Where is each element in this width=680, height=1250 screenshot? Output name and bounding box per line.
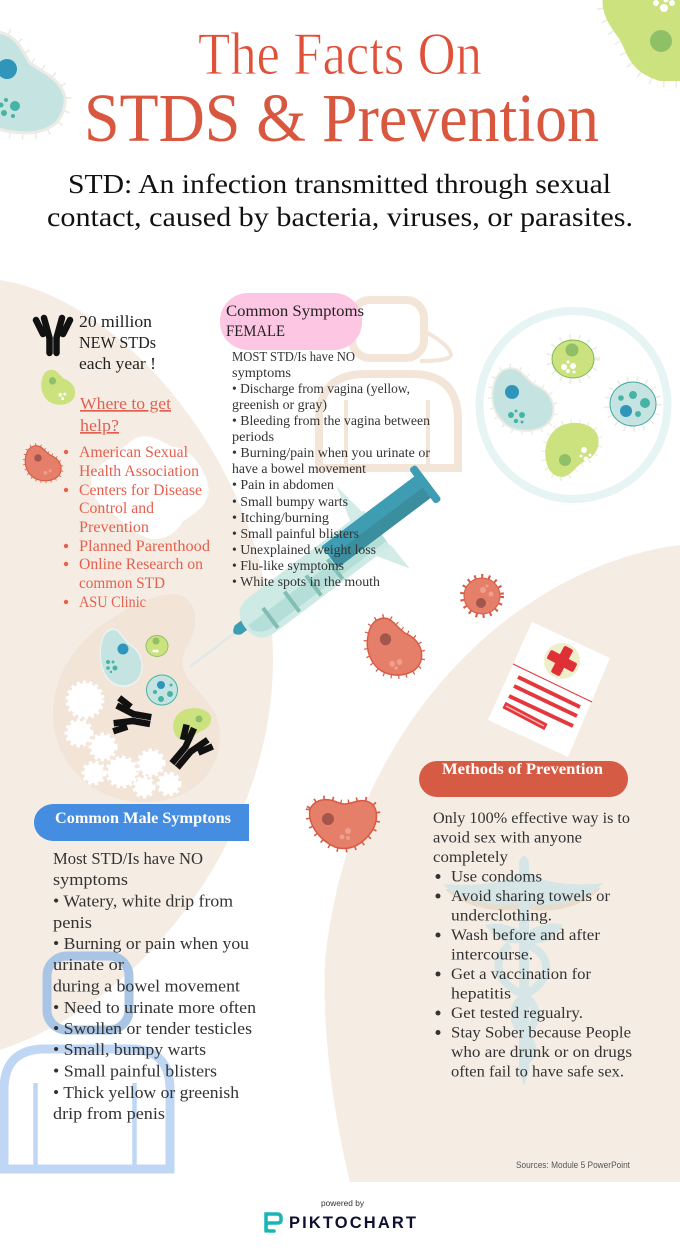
stat text: NEW STDs bbox=[79, 333, 156, 352]
stat text bbox=[79, 312, 156, 373]
list: prevention methods: underclothing. bbox=[451, 908, 552, 924]
list: male symptoms: during a bowel movement bbox=[53, 976, 240, 996]
list: male symptoms: penis bbox=[53, 913, 92, 932]
list: prevention methods: Stay Sober because People bbox=[451, 1024, 631, 1042]
icon: small green germ bbox=[41, 370, 75, 405]
list: female symptoms: • Unexplained weight loss bbox=[232, 542, 376, 557]
list: male symptoms: Most STD/Is have NO bbox=[53, 849, 203, 868]
list: prevention methods: hepatitis bbox=[451, 986, 511, 1002]
list: female symptoms: • White spots in the mouth bbox=[232, 574, 380, 589]
icon: female silhouette bbox=[319, 300, 458, 468]
heading: where to get help: Where to get bbox=[80, 394, 171, 413]
list: female symptoms bbox=[232, 349, 431, 589]
list: prevention methods: Wash before and after bbox=[451, 927, 601, 944]
icon: green germ top right bbox=[603, 0, 680, 81]
list: help resources: Centers for Disease bbox=[79, 482, 202, 499]
icon: red germ round bbox=[462, 576, 502, 616]
list: help resources: Planned Parenthood bbox=[79, 538, 210, 555]
list: male symptoms: • Burning or pain when you bbox=[53, 934, 249, 953]
icon: blue germ top left bbox=[0, 32, 65, 133]
stat text: 20 million bbox=[79, 312, 152, 331]
heading pill: methods of prevention bbox=[419, 761, 628, 797]
heading pill: female symptoms: FEMALE bbox=[226, 323, 285, 340]
footer: powered by piktochart: PIKTOCHART bbox=[289, 1214, 416, 1232]
list: female symptoms: • Flu-like symptoms bbox=[232, 558, 344, 573]
footer: powered by piktochart: powered by bbox=[321, 1198, 365, 1208]
icon: caduceus bbox=[443, 856, 603, 1086]
list: female symptoms: • Pain in abdomen bbox=[232, 477, 334, 492]
list: male symptoms: • Thick yellow or greenish bbox=[53, 1083, 240, 1102]
list: help resources: Prevention bbox=[79, 519, 149, 536]
title: STDS & Prevention bbox=[84, 80, 599, 156]
icon: antibody bbox=[36, 318, 70, 353]
panel: right cream background bbox=[325, 545, 680, 1182]
list: male symptoms: drip from penis bbox=[53, 1104, 165, 1123]
list: help resources: common STD bbox=[79, 575, 165, 592]
list: male symptoms: • Small, bumpy warts bbox=[53, 1040, 206, 1059]
icon: white splat behind links bbox=[91, 436, 209, 539]
list: female symptoms: MOST STD/Is have NO bbox=[232, 349, 355, 364]
list: male symptoms: • Need to urinate more often bbox=[53, 998, 256, 1017]
list: prevention methods: Get tested regualry. bbox=[451, 1005, 583, 1022]
list: prevention methods: Get a vaccination for bbox=[451, 966, 592, 983]
list: female symptoms: • Itching/burning bbox=[232, 510, 329, 525]
title bbox=[84, 21, 599, 156]
icon: red germ left bbox=[25, 446, 61, 481]
heading bar: male symptoms bbox=[34, 804, 249, 841]
list: prevention methods: intercourse. bbox=[451, 946, 533, 964]
list: female symptoms: • Small painful blisters bbox=[232, 526, 359, 541]
list: female symptoms: • Burning/pain when you urinate or bbox=[232, 445, 431, 460]
list: help resources: Online Research on bbox=[79, 556, 203, 573]
heading bar: male symptoms: Common Male Symptons bbox=[55, 810, 231, 827]
list: female symptoms: periods bbox=[232, 429, 274, 444]
definition text: contact, caused by bacteria, viruses, or parasites. bbox=[47, 201, 633, 232]
petri dish with germs bbox=[480, 311, 668, 499]
list: prevention methods: Use condoms bbox=[451, 868, 542, 886]
list: prevention methods: avoid sex with anyone bbox=[433, 830, 582, 846]
list: male symptoms: • Swollen or tender testicles bbox=[53, 1019, 252, 1038]
title: The Facts On bbox=[198, 21, 482, 87]
icon: red germ kidney bbox=[367, 618, 422, 675]
list: male symptoms bbox=[53, 849, 256, 1123]
list: help resources: American Sexual bbox=[79, 444, 189, 461]
list: male symptoms: urinate or bbox=[53, 955, 125, 974]
list: female symptoms: greenish or gray) bbox=[232, 397, 327, 412]
icon: medical document bbox=[488, 622, 610, 757]
list: help resources bbox=[64, 444, 210, 611]
list: male symptoms: • Small painful blisters bbox=[53, 1062, 217, 1080]
icon: male silhouette bbox=[4, 956, 170, 1169]
definition text bbox=[47, 168, 633, 232]
list: female symptoms: • Small bumpy warts bbox=[232, 494, 348, 509]
list: help resources: Health Association bbox=[79, 463, 199, 480]
list: prevention methods: Only 100% effective way is to bbox=[433, 810, 630, 827]
list: prevention methods: Avoid sharing towels or bbox=[451, 888, 611, 905]
list: female symptoms: • Discharge from vagina (yellow, bbox=[232, 381, 410, 396]
stat text: each year ! bbox=[79, 354, 156, 373]
illustration: cell with germs and antibodies bbox=[53, 594, 220, 802]
footer: powered by piktochart bbox=[266, 1198, 416, 1232]
definition text: STD: An infection transmitted through sexual bbox=[68, 168, 611, 199]
list: prevention methods: completely bbox=[433, 849, 508, 866]
icon: red germ lower bbox=[310, 800, 376, 848]
list: female symptoms: • Bleeding from the vagina between bbox=[232, 413, 430, 428]
list: help resources: ASU Clinic bbox=[79, 594, 146, 611]
list: prevention methods bbox=[433, 810, 632, 1080]
heading pill: female symptoms bbox=[220, 293, 364, 350]
heading: where to get help bbox=[80, 394, 171, 435]
heading pill: female symptoms: Common Symptoms bbox=[226, 303, 364, 320]
list: prevention methods: often fail to have safe sex. bbox=[451, 1064, 624, 1080]
list: female symptoms: have a bowel movement bbox=[232, 461, 366, 476]
heading pill: methods of prevention: Methods of Prevention bbox=[442, 761, 603, 778]
list: help resources: Control and bbox=[79, 500, 154, 517]
list: male symptoms: • Watery, white drip from bbox=[53, 892, 233, 910]
heading: where to get help: help? bbox=[80, 416, 119, 435]
list: prevention methods: who are drunk or on drugs bbox=[451, 1044, 632, 1061]
sources note: Sources: Module 5 PowerPoint bbox=[516, 1160, 630, 1170]
icon: syringe bbox=[156, 440, 463, 710]
list: male symptoms: symptoms bbox=[53, 870, 128, 889]
list: female symptoms: symptoms bbox=[232, 365, 291, 380]
panel: left cream background bbox=[0, 280, 273, 1050]
